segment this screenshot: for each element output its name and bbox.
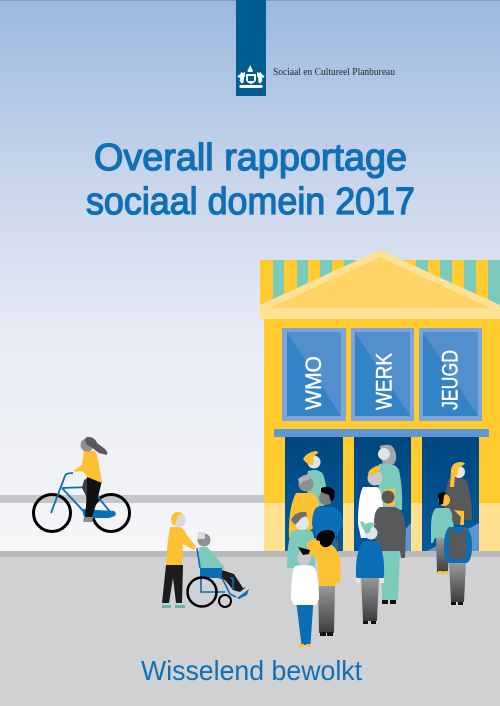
title: sociaal domein 2017: [86, 181, 415, 223]
rider hair: [85, 437, 107, 455]
window: WERK: WERK: [372, 353, 396, 410]
person: teal top grey-brown hair: [287, 512, 315, 568]
background sky: [0, 0, 500, 551]
person: grey hair teal coat: [378, 445, 402, 510]
pediment: [260, 250, 500, 319]
publisher name: Sociaal en Cultureel Planbureau: [273, 67, 395, 78]
building: [260, 250, 500, 551]
wheelchair group: [162, 512, 249, 608]
doors: [285, 437, 479, 551]
carer hair: [171, 512, 183, 525]
person: blue sweater dark hair: [312, 487, 343, 558]
person: blue sweater teal hair: [356, 521, 384, 624]
person: backpack blue jacket: [444, 510, 472, 605]
chain guard: [83, 509, 116, 518]
window: WMO: WMO: [301, 356, 326, 410]
awning bar: [274, 429, 489, 437]
person: yellow coat black hair: [306, 530, 341, 636]
bicycle wheels: [34, 494, 130, 532]
logo ribbon: [236, 0, 266, 96]
person: blonde woman teal top: [303, 451, 326, 506]
carer legs: [162, 565, 183, 603]
carer shoes: [162, 605, 185, 608]
ground: [0, 551, 500, 706]
facade: [264, 319, 500, 551]
roof stripes: [260, 260, 500, 306]
window: WERK: [351, 328, 414, 421]
subtitle: Wisselend bewolkt: [141, 655, 362, 686]
rider foot: [83, 517, 93, 522]
rider back leg: [82, 476, 96, 508]
person: grey hair yellow coat: [289, 474, 319, 538]
person: white coat blue trousers: [291, 547, 319, 647]
window: JEUGD: JEUGD: [438, 350, 462, 410]
carer head: [172, 513, 186, 527]
title: Overall rapportage: [94, 137, 407, 179]
window: WMO: [282, 328, 346, 421]
rider head: [80, 438, 94, 452]
icon: coat of arms: [238, 65, 264, 88]
person: teal top black hair: [431, 492, 454, 574]
person: long blonde hair grey coat: [444, 462, 472, 520]
window: JEUGD: [419, 328, 482, 421]
cyclist: [34, 437, 130, 532]
person: white coat yellow hair: [358, 465, 383, 538]
wheelchair occupant: [198, 532, 246, 592]
carer torso: [166, 527, 196, 565]
wheelchair: [188, 548, 249, 607]
rider front leg: [85, 477, 102, 518]
person: dark jacket teal trousers: [374, 489, 406, 604]
rider torso: [74, 450, 102, 483]
bicycle frame: [51, 473, 111, 515]
title: [86, 137, 415, 223]
back pavement band: [0, 495, 264, 503]
